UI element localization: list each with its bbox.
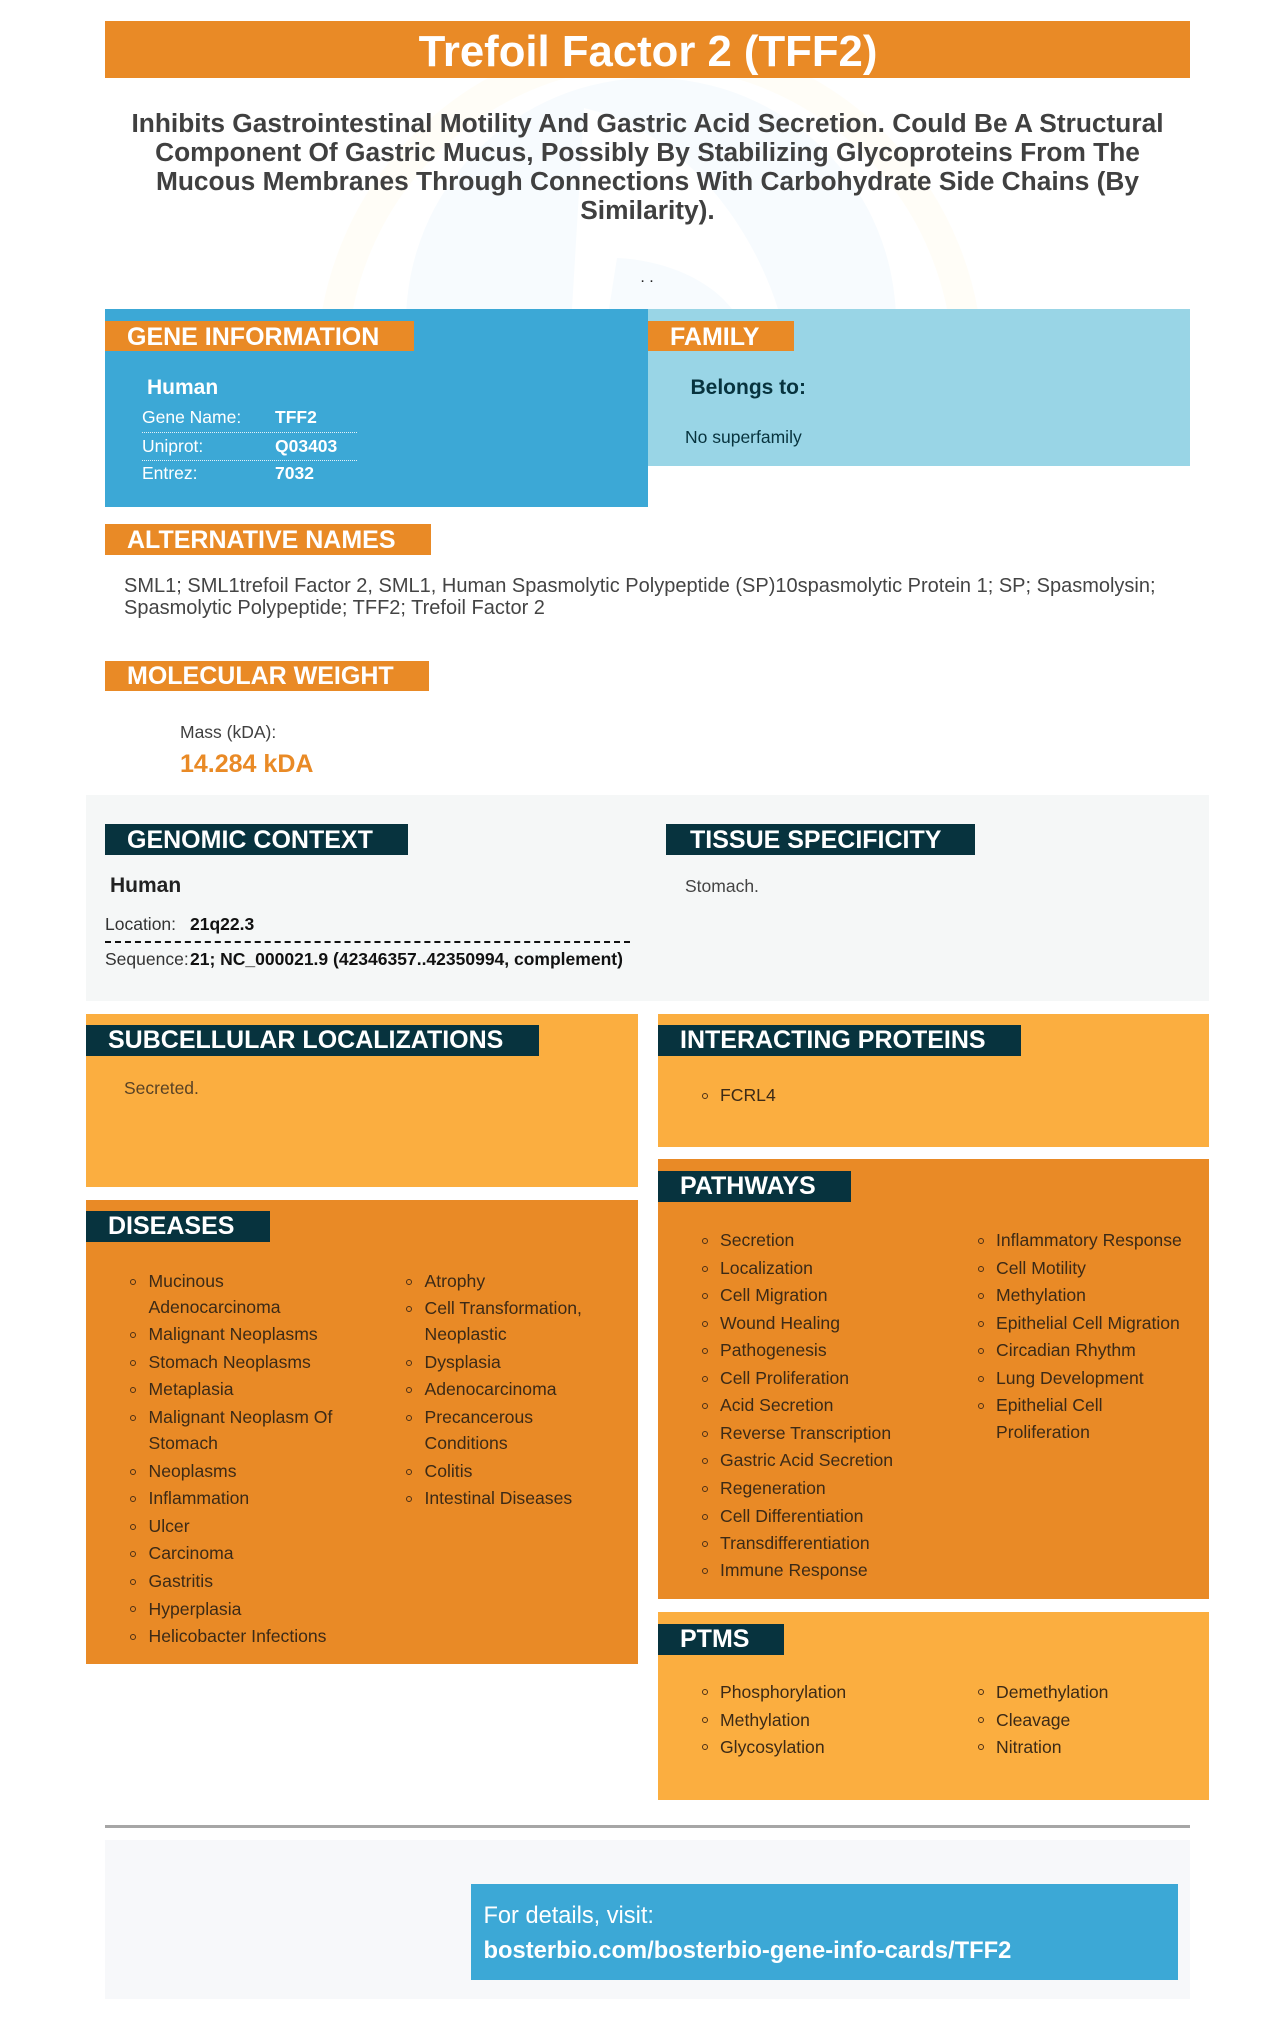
- heading: pathways: [658, 1171, 851, 1202]
- diseases list column 1: Stomach: [148, 1433, 218, 1453]
- gene info table: Gene Name:: [142, 407, 241, 427]
- pathways list column 2: Epithelial Cell: [996, 1395, 1103, 1415]
- tissue specificity text: Stomach.: [685, 876, 759, 896]
- callout URL: bosterbio.com/bosterbio-gene-info-cards/TFF2: [484, 1937, 1011, 1964]
- diseases list column 1: Gastritis: [148, 1571, 213, 1591]
- heading: alternative names: ALTERNATIVE NAMES: [127, 526, 396, 554]
- panel: diseases: [86, 1200, 638, 1664]
- diseases list column 2: Precancerous: [424, 1407, 533, 1427]
- pathways list column 1: Cell Differentiation: [720, 1506, 863, 1526]
- heading: pathways: PATHWAYS: [680, 1172, 816, 1200]
- diseases list column 1: Adenocarcinoma: [148, 1297, 281, 1317]
- background watermark logo: [300, 78, 1000, 309]
- pathways list column 1: [702, 1230, 893, 1580]
- panel: family: [648, 309, 1190, 466]
- PTMs list column 1: [702, 1682, 846, 1756]
- heading: interacting proteins: INTERACTING PROTEINS: [680, 1026, 986, 1054]
- footer panel: [105, 1840, 1190, 1999]
- pathways list column 1: Pathogenesis: [720, 1340, 827, 1360]
- pathways list column 1: Gastric Acid Secretion: [720, 1450, 893, 1470]
- localization text: Secreted.: [124, 1078, 199, 1098]
- pathways list column 1: Secretion: [720, 1230, 794, 1250]
- diseases list column 1: Malignant Neoplasms: [148, 1324, 318, 1344]
- location row: [105, 914, 254, 934]
- summary text block: Inhibits Gastrointestinal Motility And Gastric Acid Secretion. Could Be A Structural: [131, 108, 1164, 138]
- panel: pathways: [658, 1159, 1209, 1599]
- PTMs list column 2: Cleavage: [996, 1710, 1070, 1730]
- title bar: [105, 21, 1190, 78]
- heading: PTMs: [658, 1624, 784, 1654]
- callout: details link: [471, 1884, 1178, 1980]
- gene info table: Q03403: [275, 436, 337, 456]
- alternative names text: Spasmolytic Polypeptide; TFF2; Trefoil Factor 2: [124, 597, 545, 619]
- panel: subcellular localizations: [86, 1014, 638, 1187]
- pathways list column 1: Transdifferentiation: [720, 1533, 870, 1553]
- species label: Human: [110, 874, 181, 896]
- pathways list column 1: Regeneration: [720, 1478, 826, 1498]
- diseases list column 2: [406, 1271, 582, 1508]
- pathways list column 2: Epithelial Cell Migration: [996, 1313, 1180, 1333]
- diseases list column 1: Metaplasia: [148, 1379, 234, 1399]
- gene info table: TFF2: [275, 407, 317, 427]
- PTMs list column 1: Methylation: [720, 1710, 810, 1730]
- pathways list column 1: Reverse Transcription: [720, 1423, 891, 1443]
- panel: PTMs: [658, 1612, 1209, 1800]
- diseases list column 1: Neoplasms: [148, 1461, 237, 1481]
- diseases list column 2: Intestinal Diseases: [424, 1488, 572, 1508]
- diseases list column 1: Malignant Neoplasm Of: [148, 1407, 332, 1427]
- pathways list column 1: Localization: [720, 1258, 813, 1278]
- pathways list column 1: Wound Healing: [720, 1313, 840, 1333]
- gene info table: 7032: [275, 463, 314, 483]
- pathways list column 2: Methylation: [996, 1285, 1086, 1305]
- diseases list column 2: Atrophy: [424, 1271, 485, 1291]
- pathways list column 1: Immune Response: [720, 1560, 868, 1580]
- mass label: Mass (kDA):: [180, 722, 276, 742]
- heading: PTMs: PTMS: [680, 1624, 749, 1652]
- heading: diseases: [86, 1211, 270, 1242]
- pathways list column 1: Acid Secretion: [720, 1395, 833, 1415]
- heading: molecular weight: MOLECULAR WEIGHT: [127, 662, 394, 690]
- molecular weight value: [180, 722, 313, 778]
- belongs to label: Belongs to:: [690, 376, 806, 399]
- pathways list column 2: [978, 1230, 1182, 1442]
- PTMs list column 1: Glycosylation: [720, 1736, 825, 1756]
- diseases list column 2: Conditions: [424, 1433, 508, 1453]
- pathways list column 2: Inflammatory Response: [996, 1230, 1182, 1250]
- panel: gene information: [105, 309, 648, 507]
- diseases list column 1: Mucinous: [148, 1271, 224, 1291]
- alternative names text: SML1; SML1trefoil Factor 2, SML1, Human Spasmolytic Polypeptide (SP)10spasmolytic Protein 1; SP; Spasmolysin;: [124, 575, 1156, 597]
- heading: family: [648, 321, 794, 351]
- gene info table: Entrez:: [142, 463, 197, 483]
- mass value: 14.284 kDA: [180, 750, 313, 778]
- sequence row: Sequence:: [105, 949, 189, 969]
- pathways list column 2: Proliferation: [996, 1422, 1090, 1442]
- heading: genomic context: GENOMIC CONTEXT: [127, 826, 373, 854]
- pathways list column 2: Circadian Rhythm: [996, 1340, 1136, 1360]
- PTMs list column 2: Demethylation: [996, 1682, 1108, 1702]
- pathways list column 2: Lung Development: [996, 1368, 1144, 1388]
- heading: tissue specificity: TISSUE SPECIFICITY: [690, 826, 941, 854]
- protein list: FCRL4: [720, 1085, 776, 1105]
- diseases list column 2: Neoplastic: [424, 1324, 507, 1344]
- callout label: For details, visit:: [484, 1902, 654, 1928]
- alternative names text: [124, 575, 1156, 619]
- gene info table: Uniprot:: [142, 436, 203, 456]
- sequence row: 21; NC_000021.9 (42346357..42350994, complement): [190, 949, 623, 969]
- pathways list column 2: Cell Motility: [996, 1258, 1086, 1278]
- diseases list column 1: [130, 1271, 332, 1646]
- diseases list column 1: Stomach Neoplasms: [148, 1352, 311, 1372]
- heading: subcellular localizations: SUBCELLULAR LOCALIZATIONS: [108, 1026, 503, 1054]
- gene info table: [142, 407, 357, 483]
- pathways list column 1: Cell Migration: [720, 1285, 828, 1305]
- location row: Location:: [105, 914, 176, 934]
- heading: diseases: DISEASES: [108, 1212, 234, 1240]
- location row: 21q22.3: [190, 914, 254, 934]
- summary text block: [131, 108, 1164, 225]
- PTMs list column 1: Phosphorylation: [720, 1682, 846, 1702]
- diseases list column 1: Helicobacter Infections: [148, 1626, 326, 1646]
- summary text block: Similarity).: [580, 195, 715, 225]
- summary text block: Component Of Gastric Mucus, Possibly By Stabilizing Glycoproteins From The: [155, 137, 1140, 167]
- diseases list column 1: Inflammation: [148, 1488, 249, 1508]
- diseases list column 1: Ulcer: [148, 1516, 190, 1536]
- diseases list column 1: Hyperplasia: [148, 1598, 241, 1618]
- PTMs list column 2: Nitration: [996, 1736, 1062, 1756]
- pathways list column 1: Cell Proliferation: [720, 1368, 849, 1388]
- PTMs list column 2: [978, 1682, 1108, 1756]
- diseases list column 2: Adenocarcinoma: [424, 1379, 557, 1399]
- diseases list column 1: Carcinoma: [148, 1543, 234, 1563]
- small dots: . .: [640, 269, 654, 286]
- heading: family: FAMILY: [670, 323, 759, 351]
- diseases list column 2: Cell Transformation,: [424, 1298, 582, 1318]
- diseases list column 2: Colitis: [424, 1461, 472, 1481]
- summary text block: Mucous Membranes Through Connections With Carbohydrate Side Chains (By: [156, 166, 1139, 196]
- superfamily text: No superfamily: [685, 427, 802, 447]
- panel: interacting proteins: [658, 1014, 1209, 1147]
- species label: Human: [147, 376, 218, 399]
- diseases list column 2: Dysplasia: [424, 1352, 501, 1372]
- heading: gene information: GENE INFORMATION: [127, 323, 379, 351]
- panel: genomic context and tissue specificity: [86, 795, 1209, 1001]
- title bar: Trefoil Factor 2 (TFF2): [419, 27, 877, 76]
